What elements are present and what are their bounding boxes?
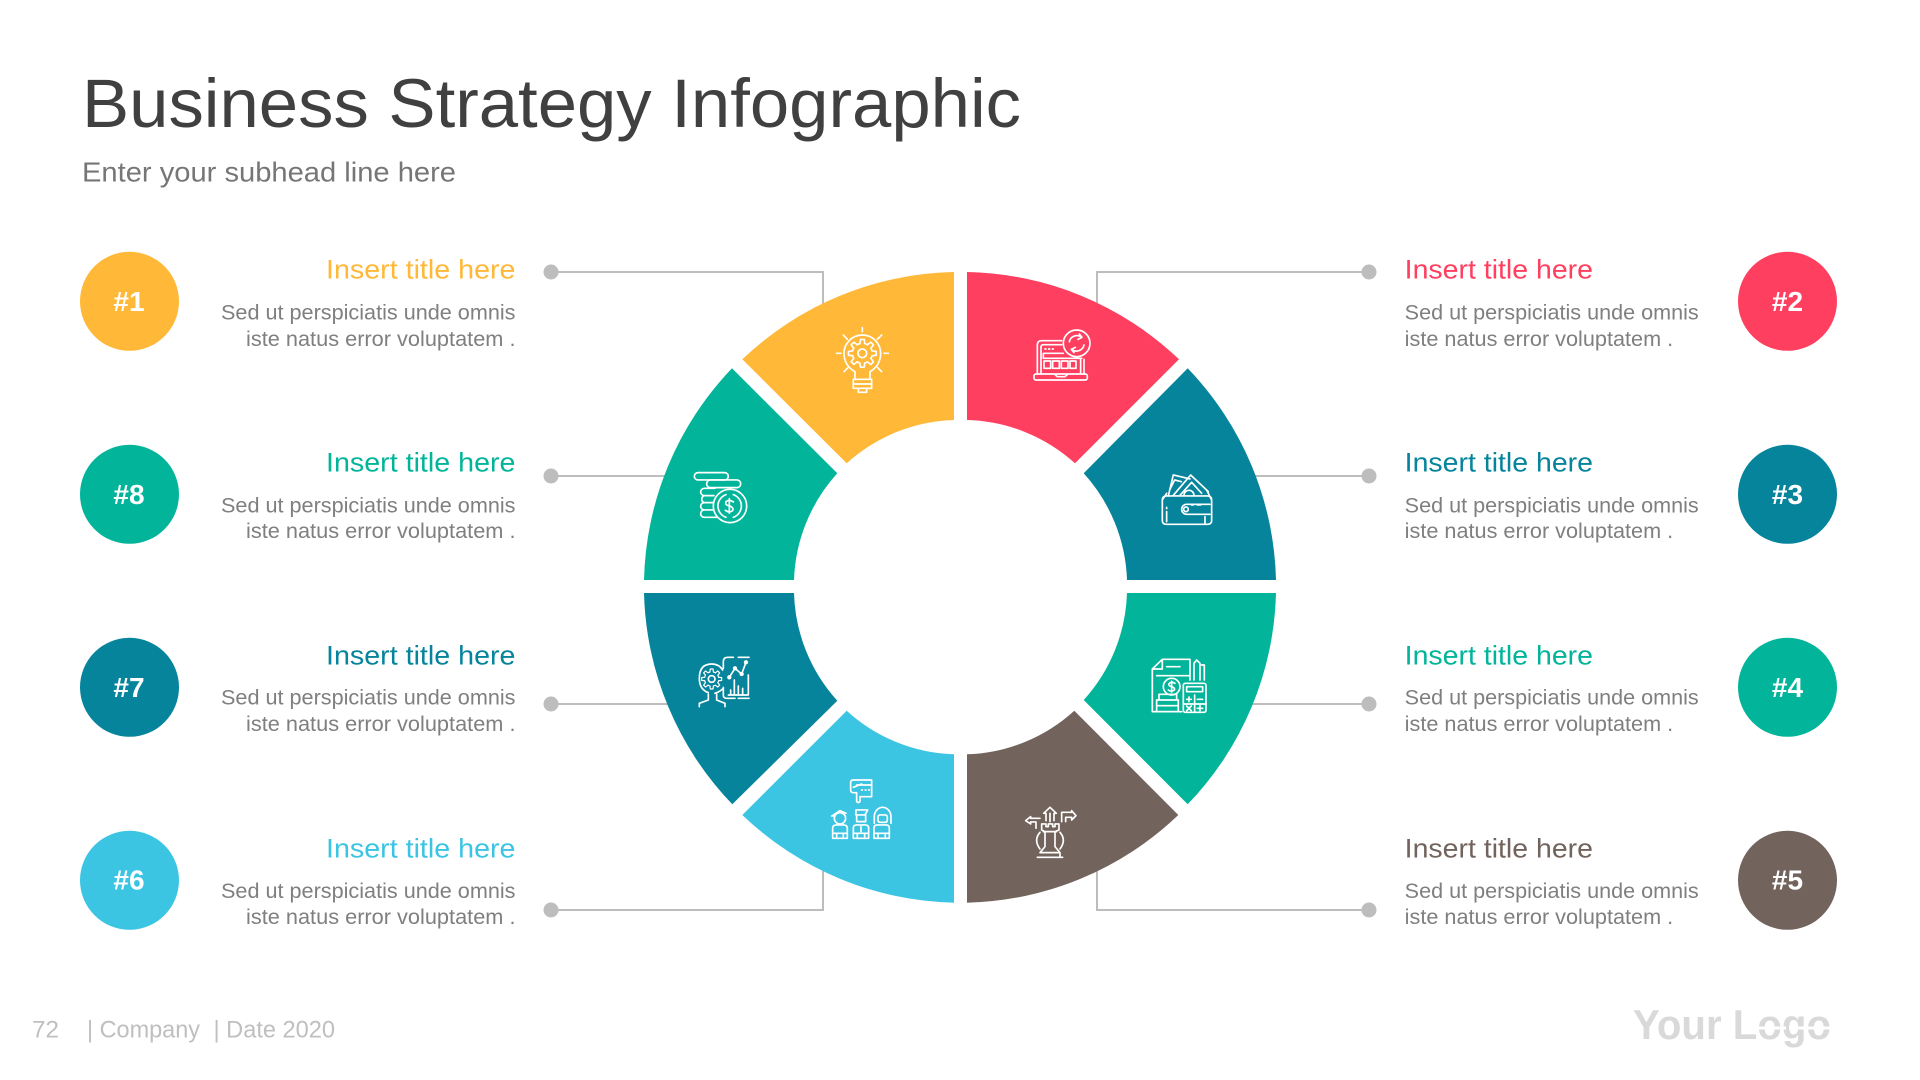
badge #3: #3 (1772, 479, 1803, 510)
company: | Company (87, 1016, 200, 1044)
badge #1: #1 (113, 286, 145, 317)
callout #5 (1097, 831, 1837, 930)
badge #3 (1738, 445, 1837, 544)
logo: Your Logo (1633, 1001, 1831, 1048)
description #6: Sed ut perspiciatis unde omnis (221, 880, 516, 903)
segment #3 (1084, 368, 1276, 580)
description #2: iste natus error voluptatem . (1405, 328, 1673, 351)
description #5: Sed ut perspiciatis unde omnis (1405, 880, 1699, 903)
title: Business Strategy Infographic (82, 65, 1021, 142)
date: | Date 2020 (214, 1016, 335, 1044)
connector #5 (1097, 860, 1376, 918)
badge #1 (80, 252, 179, 351)
footer (32, 1016, 335, 1044)
heading #5: Insert title here (1405, 834, 1593, 864)
connector #4 (1240, 696, 1376, 712)
description #4: iste natus error voluptatem . (1405, 713, 1673, 736)
description #1: Sed ut perspiciatis unde omnis (221, 302, 516, 324)
description #5: iste natus error voluptatem . (1405, 906, 1673, 929)
icon: head with gear and analytics (699, 657, 749, 707)
connector #8 (544, 468, 680, 484)
segment #7 (644, 593, 837, 804)
callout #4 (1240, 638, 1837, 737)
heading #8: Insert title here (326, 448, 516, 478)
description #1: iste natus error voluptatem . (246, 328, 516, 351)
description #8: Sed ut perspiciatis unde omnis (221, 494, 516, 518)
segment #1 (742, 272, 954, 463)
description #1 (221, 302, 516, 351)
badge #2 (1738, 252, 1837, 351)
callout #1 (80, 252, 823, 351)
heading #6: Insert title here (326, 834, 516, 864)
icon: team with paint roller (832, 780, 891, 838)
description #5 (1405, 880, 1699, 929)
segment #6 (742, 711, 954, 903)
badge #5: #5 (1772, 865, 1803, 896)
connector #1 (544, 264, 823, 320)
icon: laptop with sync (1034, 330, 1090, 380)
icon: finance report and calculator (1152, 659, 1206, 712)
badge #5 (1738, 831, 1837, 930)
heading #4: Insert title here (1405, 640, 1593, 670)
icon: lightbulb with gear (837, 328, 888, 392)
heading #1: Insert title here (326, 254, 516, 284)
description #8 (221, 494, 516, 543)
icon: coin stack with dollar (694, 473, 747, 523)
callout #2 (1097, 252, 1837, 351)
description #4: Sed ut perspiciatis unde omnis (1405, 686, 1699, 710)
segment #2 (967, 272, 1179, 463)
heading #2: Insert title here (1405, 254, 1593, 284)
badge #7: #7 (113, 672, 145, 703)
badge #4 (1738, 638, 1837, 737)
badge #2: #2 (1772, 286, 1803, 317)
description #7 (221, 686, 516, 736)
callout #7 (80, 638, 680, 737)
segment #5 (967, 711, 1178, 903)
description #6 (221, 880, 516, 929)
callout #8 (80, 445, 680, 544)
heading #7: Insert title here (326, 640, 516, 670)
icon: wallet with cash (1162, 475, 1212, 524)
badge #4: #4 (1772, 672, 1803, 703)
callout #3 (1240, 445, 1837, 544)
segment #4 (1084, 593, 1276, 804)
description #2 (1405, 302, 1699, 351)
badge #6: #6 (113, 865, 145, 896)
badge #7 (80, 638, 179, 737)
badge #8 (80, 445, 179, 544)
heading #3: Insert title here (1405, 448, 1593, 478)
badge #8: #8 (113, 479, 145, 510)
description #4 (1405, 686, 1699, 736)
description #6: iste natus error voluptatem . (246, 906, 516, 929)
description #3: iste natus error voluptatem . (1405, 520, 1673, 543)
donut chart (644, 272, 1276, 903)
description #8: iste natus error voluptatem . (246, 520, 516, 543)
description #3: Sed ut perspiciatis unde omnis (1405, 494, 1699, 518)
description #3 (1405, 494, 1699, 543)
segment #8 (644, 368, 837, 580)
connector #3 (1240, 468, 1376, 484)
description #7: Sed ut perspiciatis unde omnis (221, 686, 516, 710)
description #7: iste natus error voluptatem . (246, 713, 516, 736)
badge #6 (80, 831, 179, 930)
connector #6 (544, 860, 823, 918)
description #2: Sed ut perspiciatis unde omnis (1405, 302, 1699, 324)
connector #2 (1097, 264, 1376, 320)
icon: chess rook with arrows (1026, 807, 1076, 857)
subhead: Enter your subhead line here (82, 156, 456, 188)
page number: 72 (32, 1016, 59, 1044)
connector #7 (544, 696, 680, 712)
callout #6 (80, 831, 823, 930)
